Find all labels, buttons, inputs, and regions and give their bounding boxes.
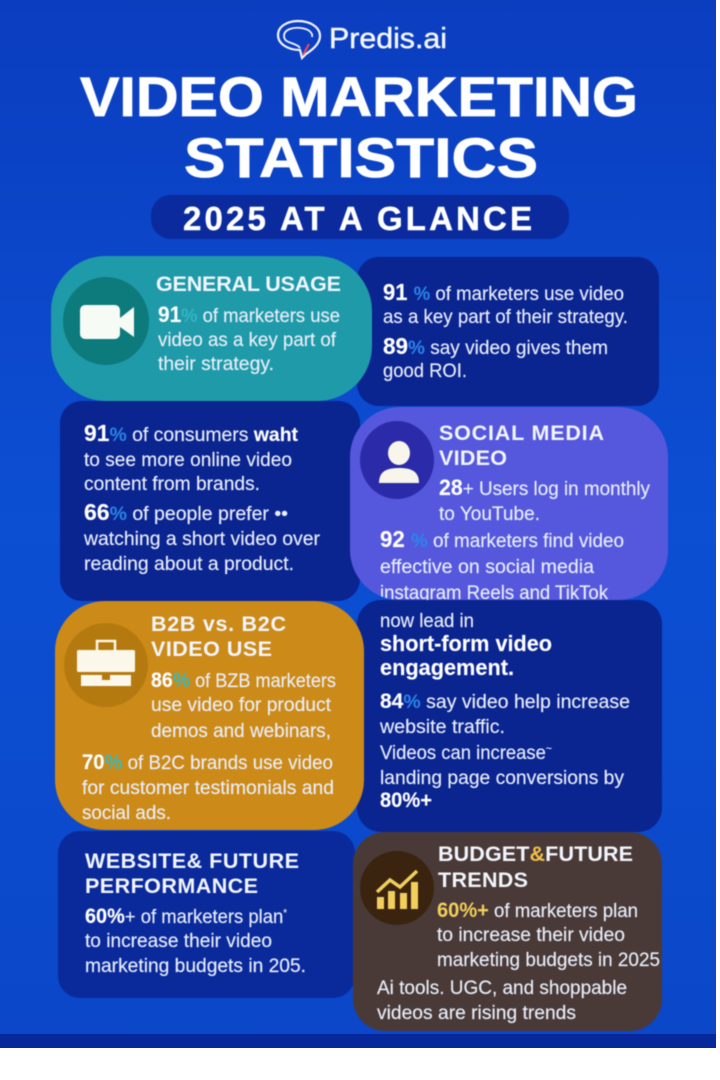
text block: 92 % of marketers find video <box>380 526 624 552</box>
panel: short-form stats: now lead in <box>380 610 474 632</box>
title <box>80 65 638 189</box>
text block <box>158 302 340 375</box>
panel: short-form stats: 80%+ <box>380 789 432 812</box>
panel: website and future performance <box>58 831 355 998</box>
panel: short-form stats: short-form video <box>380 631 552 656</box>
panel: stats top right: as a key part of their strategy. <box>383 306 628 328</box>
text block: to YouTube. <box>439 503 540 525</box>
panel: consumers <box>60 401 360 601</box>
panel: consumers: 91% of consumers waht <box>84 420 298 446</box>
text block: for customer testimonials and <box>82 777 334 799</box>
panel: stats top right: 89% say video gives them <box>383 333 608 359</box>
footer band <box>0 1034 716 1048</box>
panel: social media video <box>350 407 668 604</box>
text block: 60%+ of marketers plan <box>85 905 292 928</box>
logo <box>278 21 447 58</box>
text block: 86% of BZB marketers <box>151 669 336 692</box>
panel: stats top right <box>357 257 659 406</box>
panel: general usage <box>51 256 372 401</box>
text block: use video for product <box>151 694 332 716</box>
panel: short-form stats: landing page conversions by <box>380 767 624 789</box>
panel: stats top right: 91 % of marketers use video <box>383 279 624 305</box>
title: STATISTICS <box>184 126 538 189</box>
icon: rising bar chart <box>360 851 434 925</box>
heading: BUDGET&FUTURE <box>438 842 633 866</box>
text block: video as a key part of <box>158 329 337 351</box>
title: VIDEO MARKETING <box>80 65 638 128</box>
panel: budget and future trends <box>353 832 662 1031</box>
panel: short-form stats: website traffic. <box>379 716 505 738</box>
brand name: Predis.ai <box>329 23 447 55</box>
panel: short-form stats: engagement. <box>380 655 514 680</box>
panel: consumers: to see more online video <box>84 449 292 471</box>
heading: WEBSITE& FUTURE <box>85 849 299 873</box>
text block: * <box>283 908 287 919</box>
text block: social ads. <box>82 802 171 824</box>
panel: stats top right: good ROI. <box>383 360 467 382</box>
text block <box>377 899 660 1024</box>
icon: briefcase <box>64 623 148 707</box>
text block: 70% of B2C brands use video <box>82 751 333 774</box>
heading: GENERAL USAGE <box>156 272 341 296</box>
text block: marketing budgets in 2025 <box>437 949 660 971</box>
text block <box>85 905 306 977</box>
text block: 28+ Users log in monthly <box>439 475 650 500</box>
panel: consumers: 66% of people prefer •• <box>84 499 288 525</box>
text block: demos and webinars, <box>151 720 331 742</box>
panel: b2b vs b2c <box>55 601 364 830</box>
panel: consumers: watching a short video over <box>83 528 320 550</box>
icon: person <box>360 421 434 499</box>
text block: 60%+ of marketers plan <box>437 899 638 922</box>
text block: their strategy. <box>158 353 274 375</box>
icon: video camera <box>63 277 149 365</box>
text block: Ai tools. UGC, and shoppable <box>377 977 627 999</box>
text block <box>380 475 650 604</box>
panel: social media video: VIDEO <box>439 446 507 470</box>
panel: short-form stats: 84% say video help increase <box>380 690 630 713</box>
heading: SOCIAL MEDIA <box>439 421 604 445</box>
panel: consumers: reading about a product. <box>84 553 294 575</box>
text block: to increase their video <box>437 924 625 946</box>
text block: 91% of marketers use <box>158 302 340 327</box>
panel: website and future performance: PERFORMANCE <box>85 874 258 898</box>
panel: consumers: content from brands. <box>84 473 260 495</box>
panel: short-form stats: ~ <box>546 743 552 755</box>
panel: short-form stats <box>357 600 662 832</box>
text block: videos are rising trends <box>377 1002 576 1024</box>
subtitle pill: 2025 AT A GLANCE <box>183 200 532 237</box>
text block: effective on social media <box>380 556 594 578</box>
text block <box>82 669 336 824</box>
panel: b2b vs b2c: VIDEO USE <box>151 637 272 661</box>
text block: to increase their video <box>85 930 272 952</box>
heading: B2B vs. B2C <box>151 612 286 636</box>
text block: marketing budgets in 205. <box>85 955 306 977</box>
text block: instagram Reels and TikTok <box>380 582 608 604</box>
panel: short-form stats: Videos can increase <box>380 742 555 764</box>
icon: brain speech bubble <box>278 21 320 58</box>
panel: budget and future trends: TRENDS <box>438 868 528 892</box>
